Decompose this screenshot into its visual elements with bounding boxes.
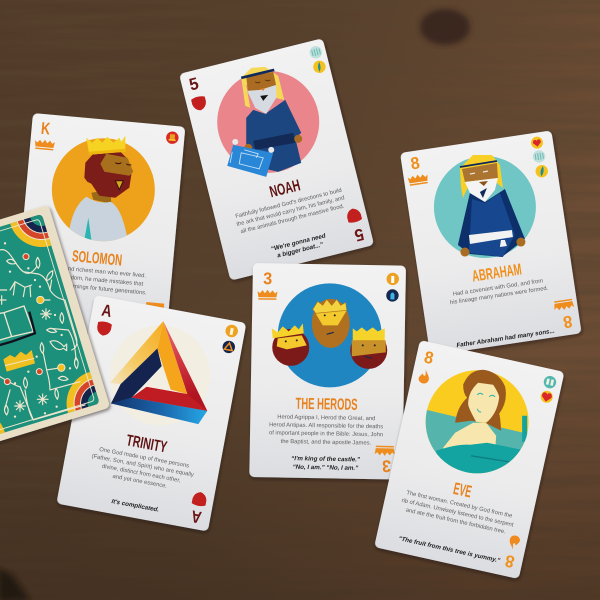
suit icon: flame (418, 368, 431, 384)
suit icon: crown (408, 173, 429, 186)
portrait: Eve (422, 370, 532, 477)
description: and yet one essence. (112, 474, 168, 490)
description (42, 264, 149, 297)
name: EVE (452, 479, 473, 501)
icon: family badge (543, 375, 557, 390)
icon: feather badge (535, 164, 549, 178)
description: the ark that would carry him, his family, and (236, 195, 345, 228)
rank K: K (40, 119, 51, 139)
quote: “The fruit from this tree is yummy.” (398, 535, 502, 565)
card: Trinity (56, 295, 246, 532)
description: Wisest and richest man who ever lived. (46, 264, 147, 279)
card: Solomon (14, 113, 185, 340)
bottom crown icon (144, 302, 165, 320)
rank 3: 3 (263, 269, 272, 288)
description: The first woman. Created by God from the (406, 490, 513, 520)
left Herod (272, 323, 309, 366)
quote (291, 455, 361, 472)
icon: triangle badge (222, 340, 236, 354)
bottom crown icon (375, 446, 395, 456)
portrait: Noah (217, 67, 319, 177)
quote: a bigger boat...” (277, 241, 325, 259)
quote: Father Abraham had many sons... (456, 328, 555, 349)
icon: feather badge (312, 59, 327, 74)
portrait: Solomon (52, 136, 155, 250)
bottom crown icon (553, 299, 574, 311)
rank 5: 5 (187, 74, 201, 95)
description: all the animals through the massive flood. (240, 203, 345, 235)
suit icon: shield (96, 321, 112, 337)
description: of important people in the Bible: Jesus, John (269, 430, 383, 438)
name: THE HERODS (295, 396, 358, 414)
book (0, 306, 35, 351)
description: Herod Agrippa I, Herod the Great, and (277, 414, 375, 422)
quote: “No, I am.” “No, I am.” (293, 464, 359, 472)
icon: baby badge (386, 289, 399, 302)
suit icon: shield (191, 95, 208, 112)
description: Faithfully followed God's directions to build (235, 188, 342, 220)
rank 8: 8 (409, 153, 421, 173)
impossible triangle graphic (110, 321, 210, 425)
quote (270, 232, 329, 261)
description (88, 446, 196, 494)
vines, leaves, dots and stars (0, 242, 85, 420)
description: (Father, Son, and Spirit) who are equally (91, 454, 194, 478)
quote: “I'm king of the castle.” (291, 455, 361, 463)
icon: scroll badge (308, 45, 323, 60)
blueprint of ark (227, 139, 274, 177)
portrait: Abraham (434, 155, 536, 258)
description: and ate the fruit from the forbidden tree. (405, 508, 506, 536)
description (269, 414, 383, 447)
bottom rank: 8 (562, 311, 574, 332)
description (399, 490, 516, 537)
icon: heart badge (540, 390, 554, 404)
card: Noah (179, 38, 374, 281)
name: ABRAHAM (471, 261, 523, 286)
crown (3, 350, 35, 372)
name: NOAH (268, 177, 302, 201)
quote: It's complicated. (111, 498, 160, 514)
bottom rank: 5 (353, 224, 366, 245)
description (234, 187, 347, 236)
card: The Herods (249, 263, 406, 480)
icon: throne badge (166, 131, 179, 144)
icon: scroll badge (532, 149, 546, 164)
description: serve as warnings for future generations. (42, 281, 147, 297)
card back: teal ornament pattern (0, 206, 112, 444)
quote: “We're gonna need (270, 232, 327, 253)
bottom suit icon (191, 491, 208, 507)
bottom rank: 8 (503, 551, 516, 571)
description: divine, distinct from each other, (101, 464, 181, 484)
description: the Baptist, and the apostle James. (281, 439, 372, 447)
description: rib of Adam. Unwisely listened to the serpent (401, 498, 514, 529)
description: One God made up of three persons (99, 447, 190, 469)
suit icon: crown (34, 139, 55, 151)
name: TRINITY (125, 432, 169, 457)
bottom rank: 3 (382, 456, 391, 475)
right Herod (350, 327, 387, 369)
description: Had a covenant with God, and from (452, 278, 544, 298)
description: Herod Antipas. All responsible for the deaths (269, 422, 383, 430)
portrait: The Herods (272, 283, 387, 387)
card: Abraham (400, 130, 582, 356)
rainbow corners (0, 215, 99, 434)
description: his lineage many nations were formed. (450, 286, 549, 306)
rank A: A (100, 301, 113, 321)
description: In his wisdom, he made mistakes that (47, 273, 144, 288)
card: Eve (374, 340, 564, 579)
rank 8: 8 (422, 348, 435, 368)
bottom rank: A (190, 506, 203, 527)
bottom suit icon (345, 207, 362, 224)
bottom flame icon (508, 535, 521, 551)
suit icon: crown (257, 290, 278, 300)
center Herod (312, 299, 350, 348)
name: SOLOMON (71, 248, 123, 270)
icon: people badge (386, 273, 399, 285)
icon: people badge (224, 324, 239, 338)
icon: heart badge (530, 136, 544, 149)
